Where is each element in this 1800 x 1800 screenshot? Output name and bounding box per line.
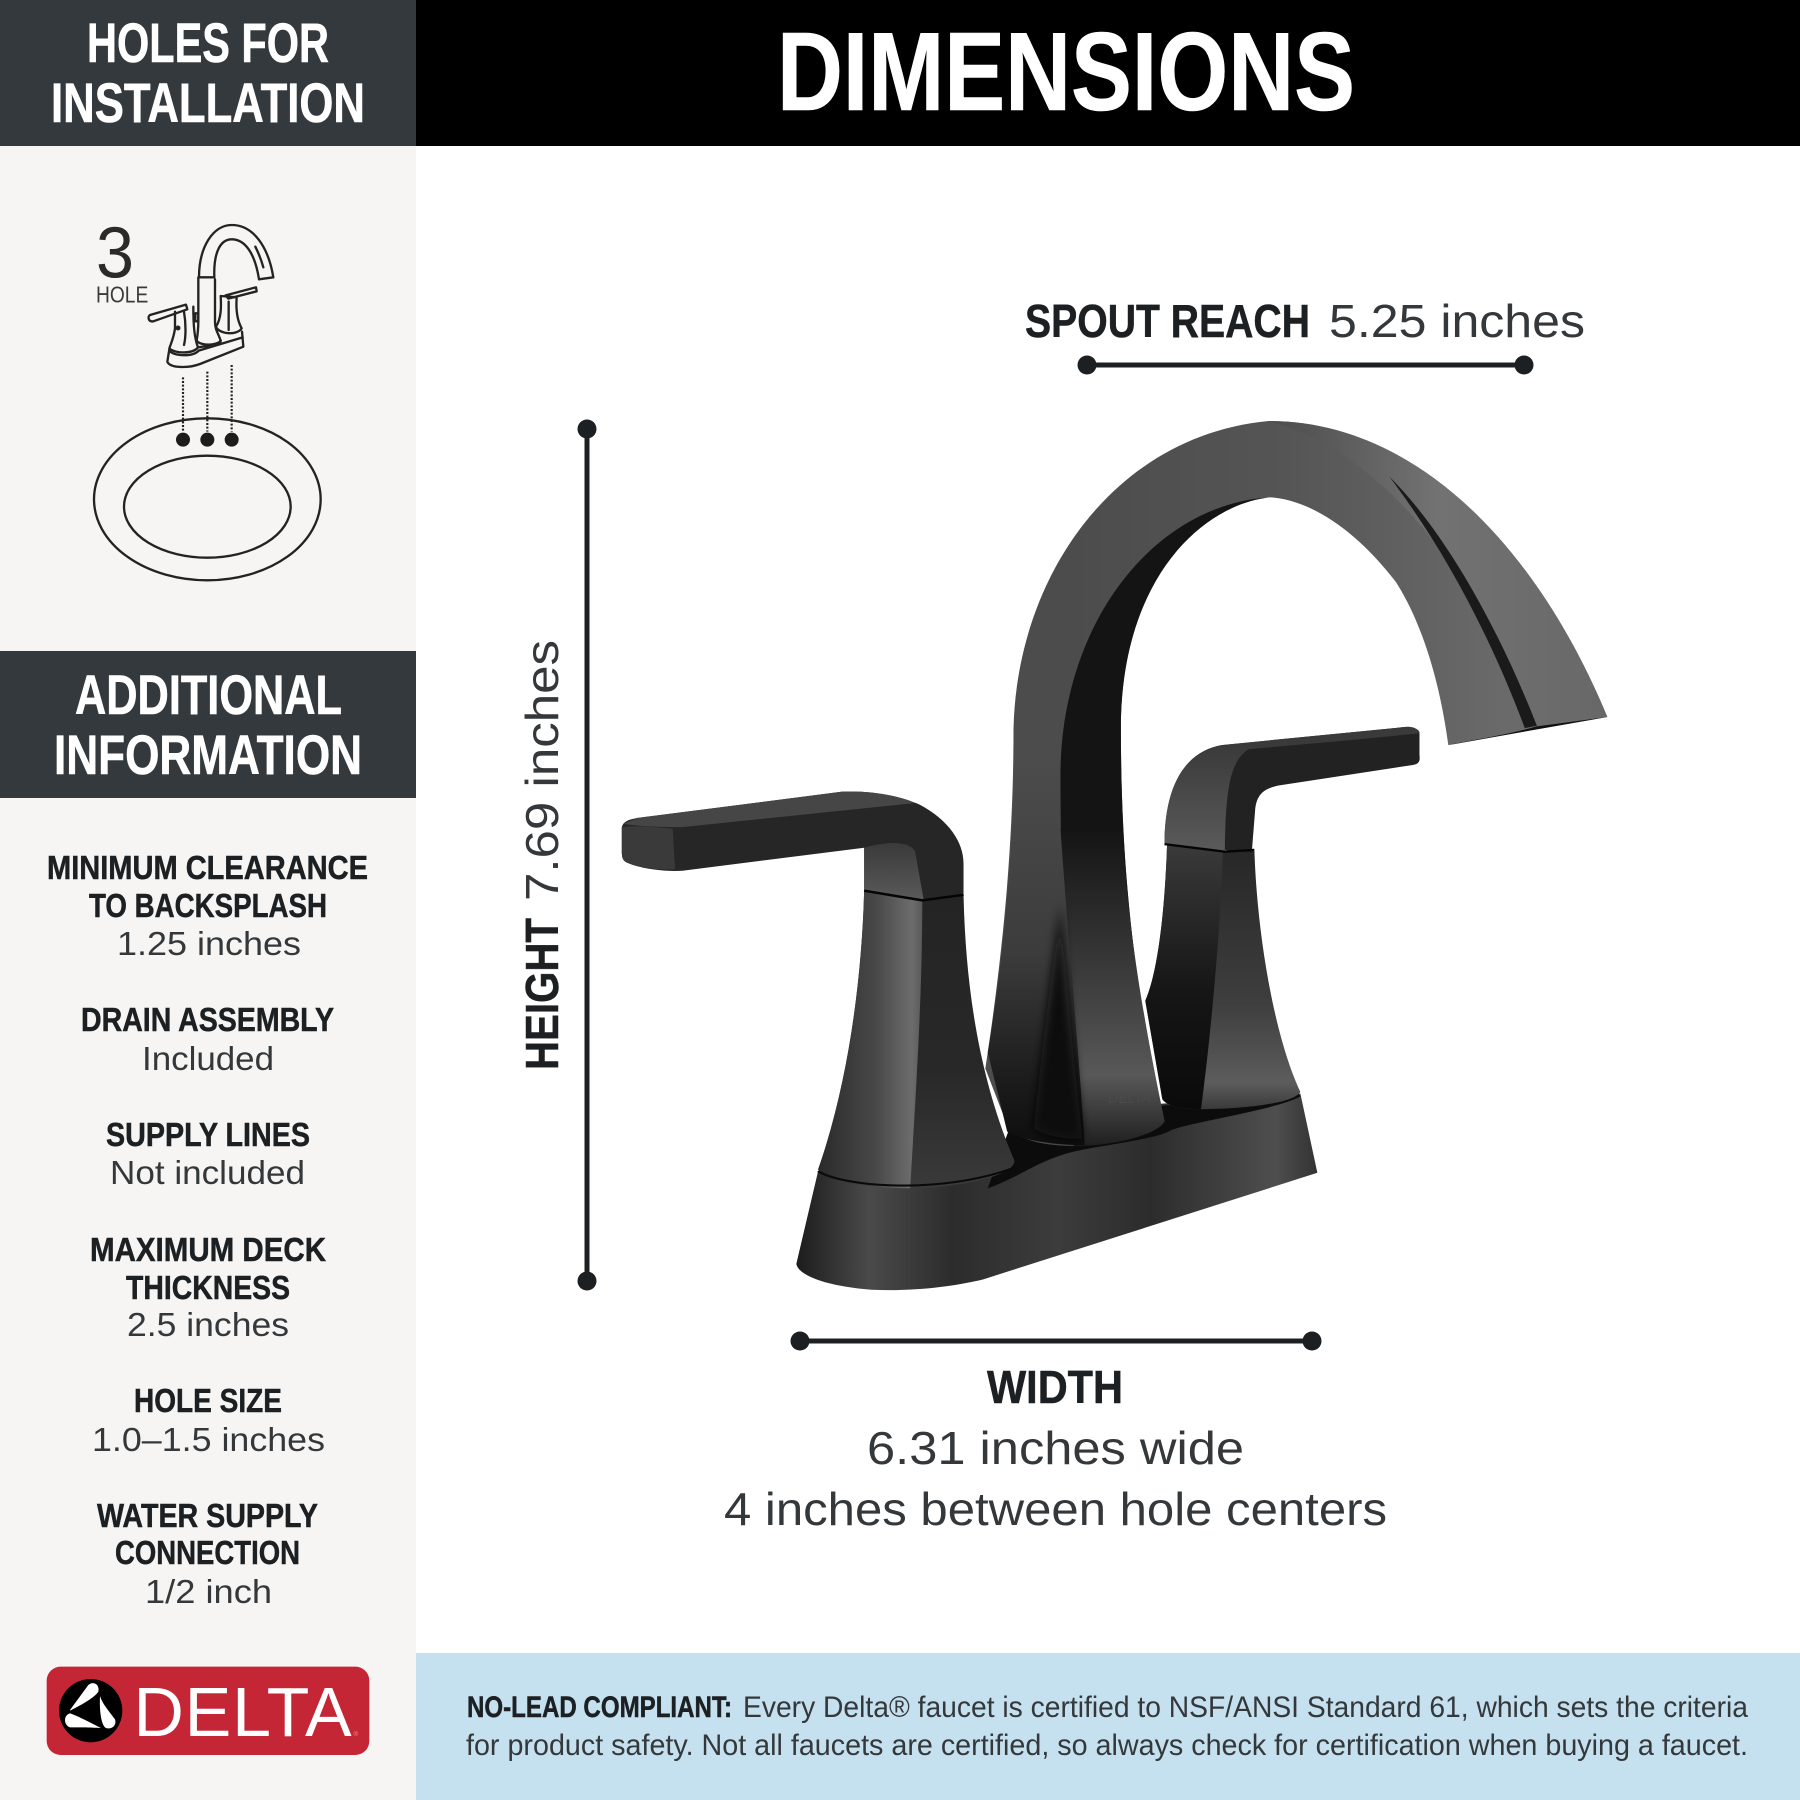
hole count label <box>96 213 148 307</box>
spout inner shadow <box>1060 497 1272 1146</box>
left lever <box>622 791 964 903</box>
dimension: height: HEIGHT <box>516 918 568 1070</box>
spec: water supply connection: 1/2 inch <box>145 1573 272 1610</box>
callout: no-lead compliant: NO-LEAD COMPLIANT: <box>467 1691 732 1724</box>
spec: hole size: 1.0–1.5 inches <box>92 1421 325 1458</box>
spec: water supply connection: CONNECTION <box>115 1534 300 1571</box>
spec: maximum deck thickness: 2.5 inches <box>127 1306 289 1343</box>
spec: hole size <box>92 1382 325 1458</box>
width line <box>790 1332 1322 1350</box>
title: dimensions: DIMENSIONS <box>777 10 1355 134</box>
logo mark <box>59 1679 122 1742</box>
dimension: height: 7.69 inches <box>516 640 568 901</box>
spout <box>985 421 1607 1146</box>
spout outer face <box>1268 421 1607 726</box>
spout lower shading <box>988 760 1165 1145</box>
sink outline <box>94 418 321 580</box>
heading: holes for installation <box>0 0 416 146</box>
dimension: spout reach: SPOUT REACH <box>1025 295 1310 347</box>
hole count label: HOLE <box>96 281 148 307</box>
spec: maximum deck thickness: MAXIMUM DECK <box>90 1231 326 1268</box>
spec: hole size: HOLE SIZE <box>134 1382 282 1419</box>
callout: no-lead compliant <box>416 1653 1800 1800</box>
base seam <box>818 1168 1014 1186</box>
dimension: spout reach <box>1025 295 1585 374</box>
dimension: width <box>724 1332 1387 1535</box>
spec: supply lines <box>106 1116 310 1191</box>
callout: no-lead compliant: Every Delta® faucet is certified to NSF/ANSI Standard 61, which sets the criteria <box>743 1691 1748 1724</box>
dimension: height <box>516 420 596 1290</box>
callout: no-lead compliant: for product safety. Not all faucets are certified, so always check for certification when buying a faucet. <box>466 1729 1748 1762</box>
spout outlet <box>1448 717 1607 745</box>
spec: water supply connection <box>97 1497 318 1610</box>
sink holes <box>176 433 239 447</box>
spout body <box>985 421 1607 1146</box>
panel: sidebar background <box>0 146 416 1800</box>
left handle body <box>818 891 1014 1188</box>
heading: holes for installation: HOLES FOR <box>87 11 329 74</box>
spec: drain assembly <box>81 1001 334 1077</box>
dotted alignment lines <box>183 365 232 432</box>
spec: supply lines: SUPPLY LINES <box>106 1116 310 1153</box>
spout logo mark: DELTA <box>1108 1090 1151 1107</box>
dimension: width: 4 inches between hole centers <box>724 1483 1387 1535</box>
dimension: spout reach: 5.25 inches <box>1329 295 1585 347</box>
small faucet line drawing <box>149 225 273 367</box>
spec: minimum clearance: TO BACKSPLASH <box>89 887 327 924</box>
height line <box>578 420 596 1290</box>
spec: minimum clearance: 1.25 inches <box>117 925 301 962</box>
heading: additional information <box>0 651 416 798</box>
heading: holes for installation: INSTALLATION <box>51 71 365 134</box>
heading: additional information: ADDITIONAL <box>75 663 342 726</box>
spec: maximum deck thickness <box>90 1231 326 1343</box>
product photo: faucet <box>622 421 1607 1290</box>
right lever <box>1164 727 1420 853</box>
spec: minimum clearance: MINIMUM CLEARANCE <box>47 849 368 886</box>
spec: drain assembly: DRAIN ASSEMBLY <box>81 1001 334 1038</box>
icon: three hole faucet and sink <box>94 213 321 580</box>
logo: delta: ® <box>353 1730 358 1738</box>
logo: delta: DELTA <box>133 1673 352 1751</box>
left handle <box>622 791 1014 1188</box>
spec: drain assembly: Included <box>142 1040 274 1077</box>
spec: supply lines: Not included <box>110 1154 305 1191</box>
spec: water supply connection: WATER SUPPLY <box>97 1497 318 1534</box>
title: dimensions <box>416 0 1800 146</box>
hole count label: 3 <box>96 213 134 294</box>
spout reach line <box>1078 356 1534 374</box>
dimension: width: 6.31 inches wide <box>867 1422 1244 1474</box>
spout ridge <box>1389 477 1537 728</box>
spec: minimum clearance <box>47 849 368 962</box>
right handle <box>1145 844 1300 1109</box>
faucet base <box>796 1092 1317 1290</box>
logo: delta <box>47 1667 369 1755</box>
spec: maximum deck thickness: THICKNESS <box>126 1269 290 1306</box>
heading: additional information: INFORMATION <box>54 723 362 786</box>
dimension: width: WIDTH <box>987 1361 1123 1413</box>
